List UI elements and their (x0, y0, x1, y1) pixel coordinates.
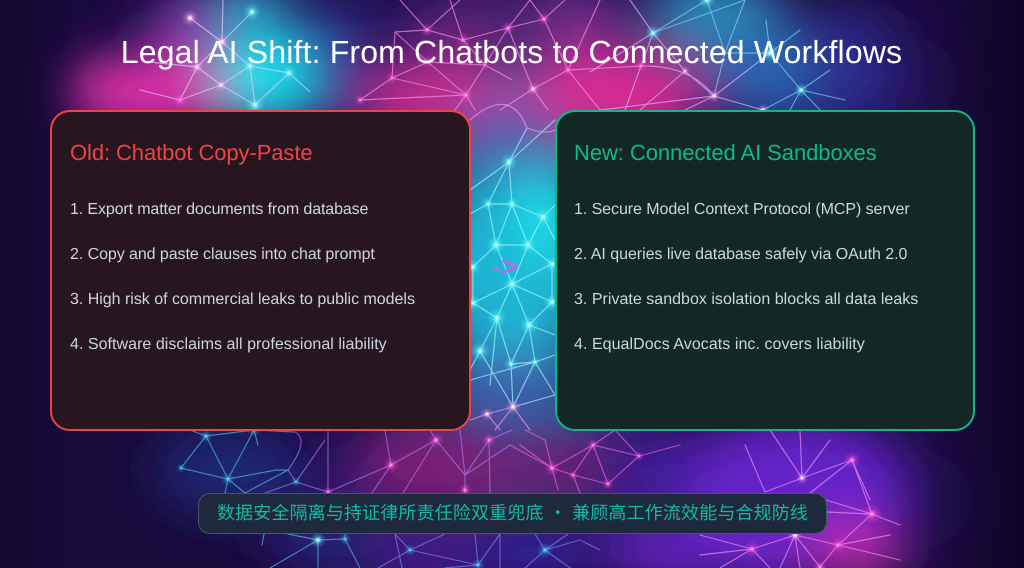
step 1: 1. Secure Model Context Protocol (MCP) server (574, 201, 910, 218)
step 4: 4. EqualDocs Avocats inc. covers liability (574, 336, 865, 353)
step 3: 3. High risk of commercial leaks to public models (70, 291, 415, 308)
panel: new connected AI sandboxes (554, 110, 975, 430)
footer callout (198, 493, 827, 534)
step 2: 2. AI queries live database safely via OAuth 2.0 (574, 246, 907, 263)
decorative network lines (140, 0, 900, 568)
decorative network nodes (172, 0, 882, 568)
arrow: -> (492, 251, 518, 282)
step 4: 4. Software disclaims all professional liability (70, 336, 387, 353)
title: Legal AI Shift: From Chatbots to Connected Workflows (121, 34, 902, 70)
panel: old chatbot copy-paste (50, 110, 470, 430)
heading: new: New: Connected AI Sandboxes (574, 140, 877, 165)
step 3: 3. Private sandbox isolation blocks all data leaks (574, 291, 918, 308)
step 2: 2. Copy and paste clauses into chat prompt (70, 246, 375, 263)
step 1: 1. Export matter documents from database (70, 201, 368, 218)
footer callout: 数据安全隔离与持证律所责任险双重兜底 · 兼顾高工作流效能与合规防线 (217, 499, 808, 525)
heading: old: Old: Chatbot Copy-Paste (70, 140, 312, 165)
